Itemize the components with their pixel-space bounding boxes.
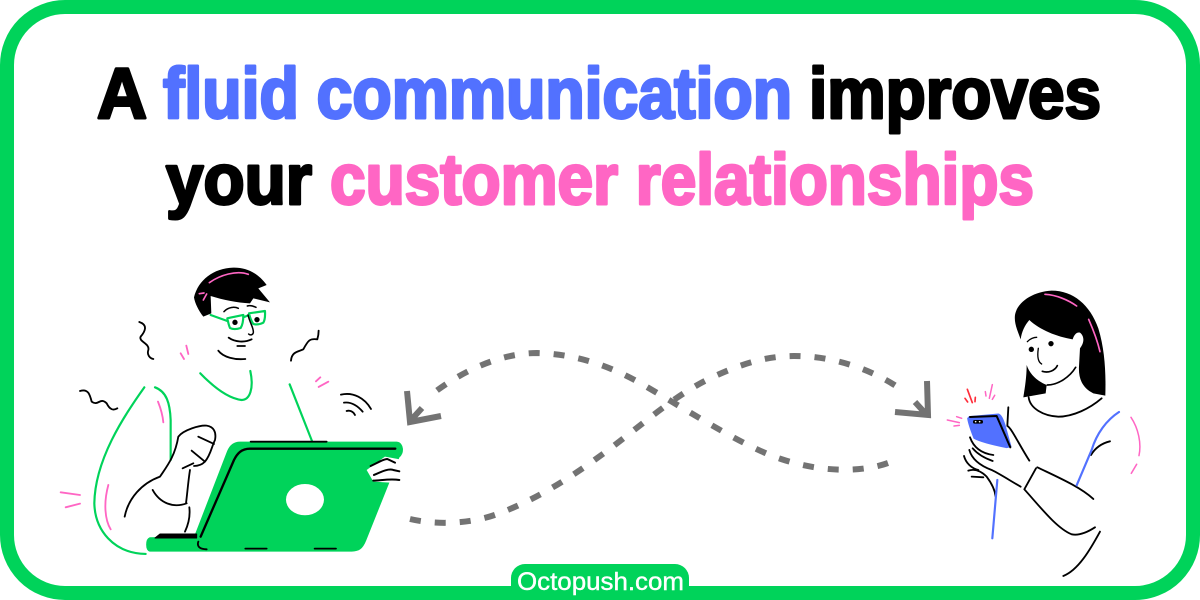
pink and red sparks xyxy=(947,385,1140,473)
title: A xyxy=(97,55,147,134)
face xyxy=(1027,337,1076,385)
dashed arrow to the man xyxy=(431,353,888,470)
illustration: woman with phone xyxy=(947,291,1140,576)
motion lines xyxy=(61,346,328,529)
laptop logo xyxy=(286,484,324,515)
hair xyxy=(194,268,270,317)
neckline xyxy=(1029,397,1102,417)
dashed arrow to the woman xyxy=(410,356,905,523)
hand on laptop xyxy=(367,457,403,483)
glasses xyxy=(211,311,265,329)
title: your xyxy=(166,141,312,220)
laptop xyxy=(147,443,402,550)
shirt outline xyxy=(94,371,312,554)
arm and fist xyxy=(125,426,215,532)
title: customer relationships xyxy=(330,141,1034,220)
arrow head right xyxy=(895,381,928,415)
footer badge: Octopush.com xyxy=(517,568,684,596)
arrows: dashed curves between people xyxy=(407,353,928,523)
face xyxy=(218,306,260,359)
arrow head left xyxy=(407,391,441,422)
hair xyxy=(1015,291,1105,397)
blue clothes lines xyxy=(992,412,1119,538)
phone xyxy=(968,414,1011,448)
laptop details xyxy=(201,449,395,537)
title: improves xyxy=(809,55,1101,134)
title: fluid communication xyxy=(163,55,792,134)
hands and sleeves xyxy=(964,407,1110,576)
illustration: man with laptop xyxy=(61,268,403,554)
title xyxy=(97,55,1101,220)
